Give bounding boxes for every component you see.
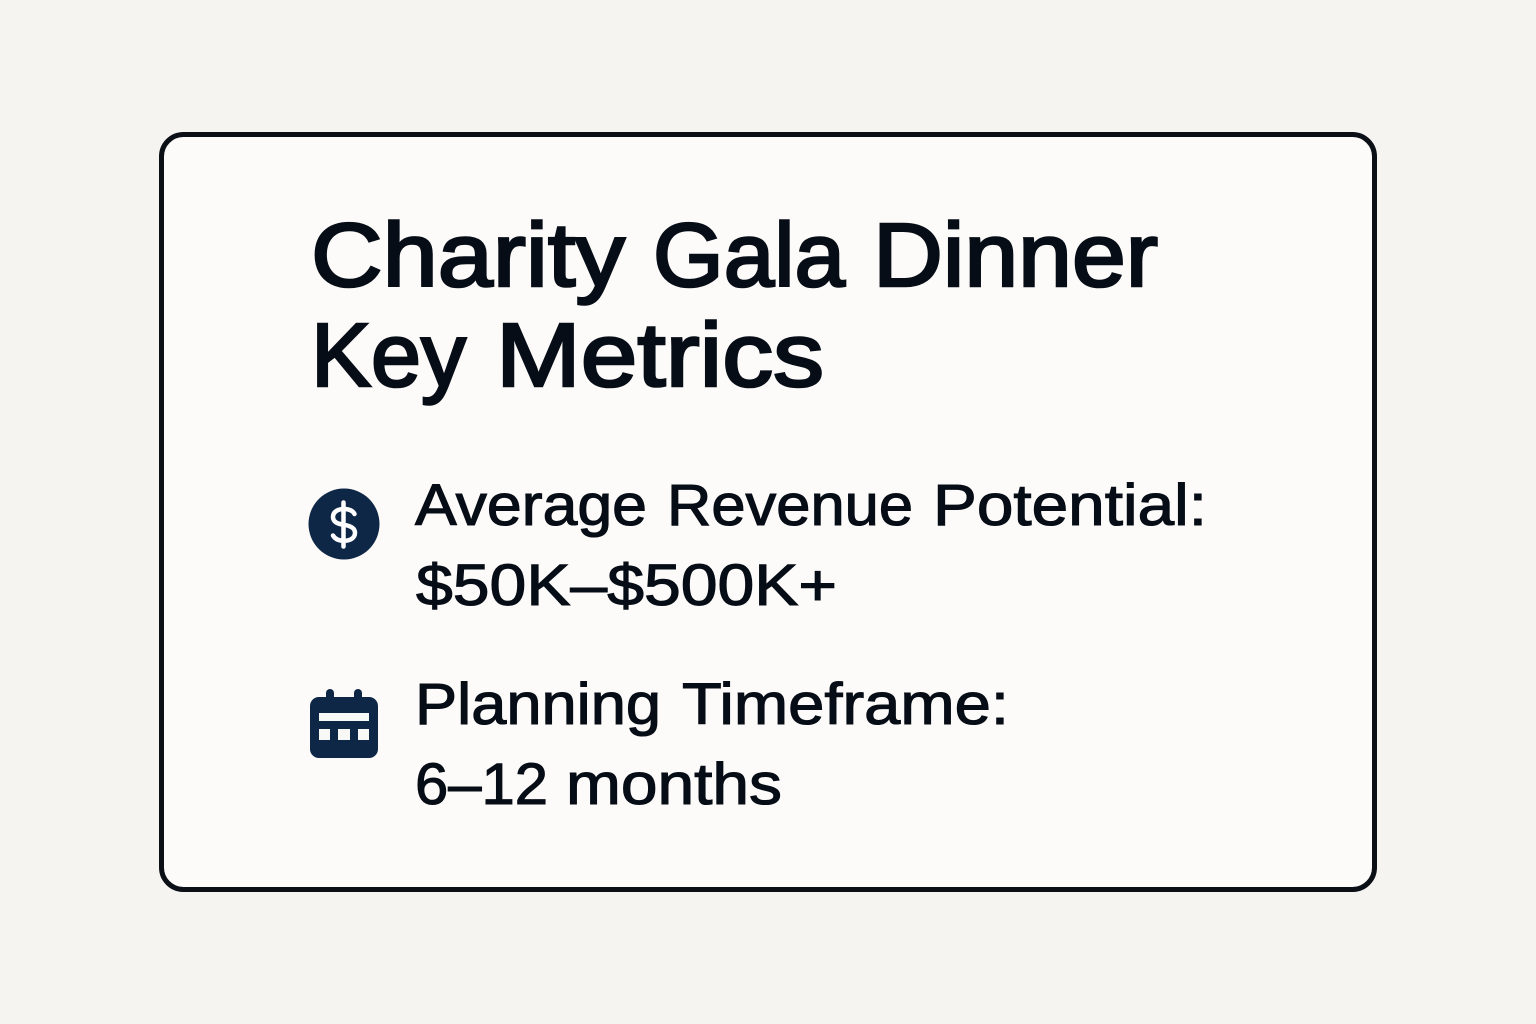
title: Metrics	[496, 306, 824, 406]
title: Dinner	[873, 206, 1158, 306]
text: revenue potential: $50K–$500K+	[416, 553, 837, 618]
icon: calendar	[310, 689, 378, 758]
icon: dollar coin	[308, 488, 380, 560]
title: Gala	[653, 206, 846, 306]
text: revenue potential: Revenue	[667, 473, 913, 538]
text: planning timeframe: Timeframe:	[682, 672, 1009, 737]
text: planning timeframe: 6–12	[415, 752, 548, 817]
text: planning timeframe: Planning	[415, 672, 661, 737]
text: revenue potential	[415, 473, 1207, 618]
title: Key	[311, 306, 466, 406]
title: Charity	[311, 206, 625, 306]
text: planning timeframe: months	[566, 752, 782, 817]
title	[311, 206, 1158, 406]
text: revenue potential: Average	[415, 473, 647, 538]
text: revenue potential: Potential:	[933, 473, 1207, 538]
text: planning timeframe	[415, 672, 1009, 817]
panel: metrics card	[162, 134, 1374, 890]
